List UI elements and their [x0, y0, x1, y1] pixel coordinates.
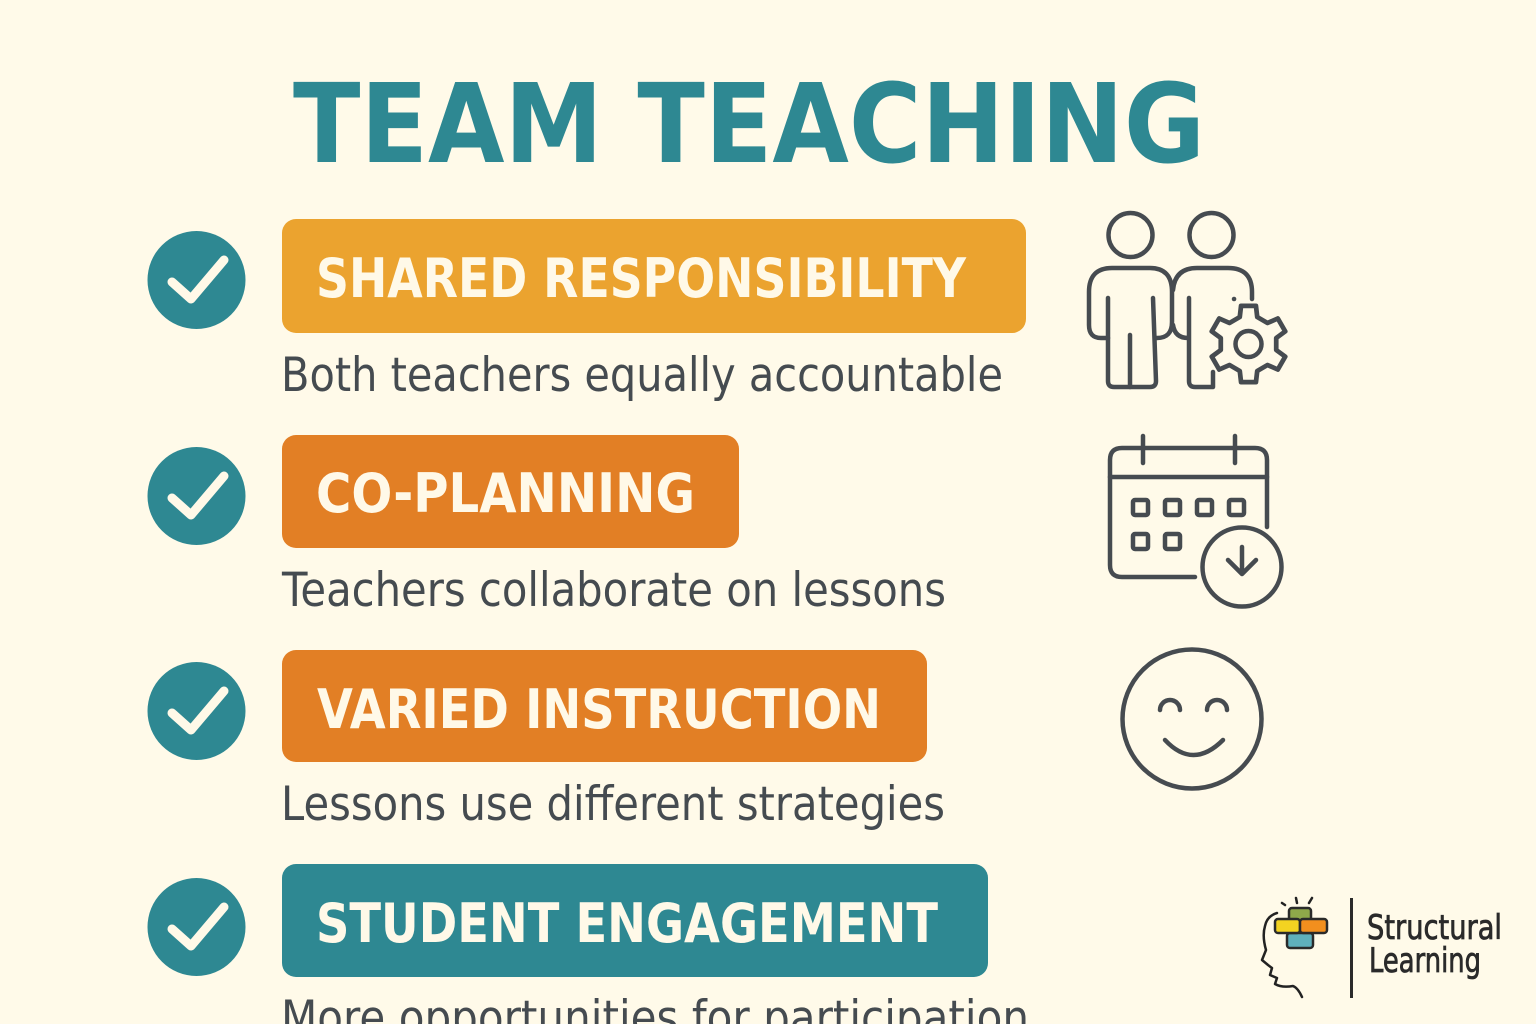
icon: check badge	[148, 662, 246, 760]
banner: shared responsibility	[282, 219, 1026, 333]
panel: co-planning	[148, 435, 946, 618]
icon: smiley face	[1122, 650, 1262, 788]
banner: co-planning: CO-PLANNING	[316, 462, 695, 525]
description: Lessons use different strategies	[281, 777, 945, 832]
banner: varied instruction	[282, 650, 927, 762]
banner: shared responsibility: SHARED RESPONSIBILITY	[316, 247, 967, 310]
panel: varied instruction	[148, 650, 945, 832]
panel: shared responsibility	[148, 219, 1026, 403]
icon: two people with gear	[1089, 213, 1285, 387]
panel: student engagement	[148, 864, 1029, 1024]
logo: Structural Learning	[1262, 898, 1502, 998]
icon: check badge	[148, 878, 246, 976]
logo wordmark: Learning	[1369, 941, 1481, 981]
banner: student engagement: STUDENT ENGAGEMENT	[316, 892, 938, 955]
icon: calendar with download	[1110, 436, 1282, 606]
logo mark: head and blocks	[1262, 898, 1327, 997]
banner: student engagement	[282, 864, 988, 977]
banner: co-planning	[282, 435, 739, 548]
icon: check badge	[148, 447, 246, 545]
description: Both teachers equally accountable	[281, 348, 1003, 403]
banner: varied instruction: VARIED INSTRUCTION	[317, 678, 881, 741]
logo wordmark	[1367, 908, 1502, 981]
title: TEAM TEACHING	[293, 60, 1205, 188]
logo divider	[1350, 898, 1353, 998]
logo wordmark: Structural	[1367, 908, 1502, 948]
description: Teachers collaborate on lessons	[281, 563, 946, 618]
icon: check badge	[148, 231, 246, 329]
